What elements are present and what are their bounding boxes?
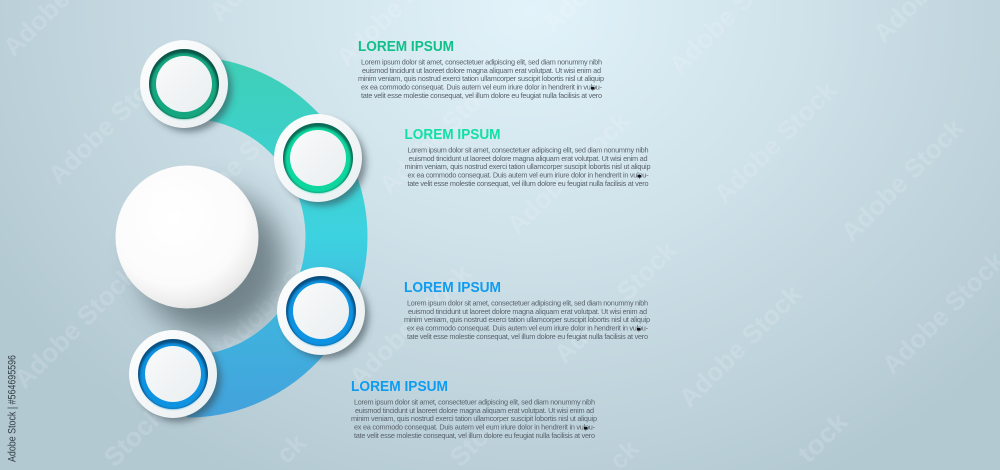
body text 3: tate velit esse molestie consequat, vel illum dolore eu feugiat nulla facilisis at vero	[407, 332, 648, 341]
body text 4: Lorem ipsum dolor sit amet, consectetuer adipiscing elit, sed diam nonummy nibh	[354, 398, 595, 406]
node 2: bright green ring button	[274, 114, 366, 206]
body text 1: tate velit esse molestie consequat, vel illum dolore eu feugiat nulla facilisis at vero	[361, 91, 602, 100]
node 1: green ring button	[140, 40, 232, 132]
text block 2	[404, 127, 650, 188]
watermark pattern: ck	[270, 427, 312, 469]
body text 4: minim veniam, quis nostrud exerci tation ullamcorper suscipit lobortis nisl ut aliquip	[351, 414, 597, 423]
body text 3: minim veniam, quis nostrud exerci tation ullamcorper suscipit lobortis nisl ut aliquip	[404, 315, 650, 324]
watermark pattern: Adobe Stock	[170, 95, 305, 230]
watermark pattern: tock	[791, 406, 854, 469]
watermark pattern: Adobe Stock	[548, 234, 683, 369]
node 3: blue ring button	[277, 267, 369, 359]
body text 2: tate velit esse molestie consequat, vel illum dolore eu feugiat nulla facilisis at vero	[408, 179, 648, 188]
body text 2: Lorem ipsum dolor sit amet, consectetuer adipiscing elit, sed diam nonummy nibh	[408, 146, 648, 154]
heading 2: LOREM IPSUM	[404, 127, 500, 143]
shadow of central sphere	[140, 190, 284, 334]
stock credit: Adobe Stock | #564695596	[6, 355, 18, 462]
body text 4: tate velit esse molestie consequat, vel illum dolore eu feugiat nulla facilisis at vero	[354, 431, 595, 440]
body text 2: minim veniam, quis nostrud exerci tation ullamcorper suscipit lobortis nisl ut aliquip	[404, 162, 650, 171]
watermark pattern: Adobe Stock	[673, 278, 808, 413]
watermark pattern: Adobe Stock	[343, 257, 478, 392]
heading 4: LOREM IPSUM	[351, 379, 448, 395]
body text 4	[351, 398, 597, 440]
body text 3: Lorem ipsum dolor sit amet, consectetuer adipiscing elit, sed diam nonummy nibh	[407, 298, 648, 308]
curved gradient arc band	[187, 88, 336, 386]
node 4: blue ring button	[129, 330, 221, 422]
body text 1: minim veniam, quis nostrud exerci tation ullamcorper suscipit lobortis nisl ut aliquip	[358, 74, 604, 83]
body text 3: ex ea commodo consequat. Duis autem vel eum iriure dolor in hendrerit in vulpu-	[407, 323, 649, 332]
heading 1: LOREM IPSUM	[358, 39, 454, 55]
watermark pattern: Adobe Stock	[835, 112, 970, 247]
watermark pattern: Adobe Stock	[373, 65, 508, 200]
body text 1: euismod tincidunt ut laoreet dolore magna aliquam erat volutpat. Ut wisi enim ad	[362, 66, 601, 75]
central white sphere	[116, 166, 258, 308]
watermark pattern: Adobe Stock	[708, 74, 843, 209]
body text 1: Lorem ipsum dolor sit amet, consectetuer adipiscing elit, sed diam nonummy nibh	[361, 58, 602, 66]
body text 4: euismod tincidunt ut laoreet dolore magna aliquam erat volutpat. Ut wisi enim ad	[355, 406, 594, 415]
text block 4	[351, 379, 597, 440]
text block 3	[404, 280, 650, 341]
body text 2	[404, 146, 650, 188]
watermark pattern: Adobe Stock	[213, 224, 348, 359]
heading 3: LOREM IPSUM	[404, 280, 501, 296]
watermark pattern: Adobe Stock	[501, 105, 636, 240]
body text 4: ex ea commodo consequat. Duis autem vel eum iriure dolor in hendrerit in vulpu-	[354, 422, 596, 431]
text block 1	[358, 39, 604, 100]
body text 1: ex ea commodo consequat. Duis autem vel eum iriure dolor in hendrerit in vulpu-	[361, 82, 603, 91]
watermark pattern: Adobe Stock	[8, 259, 143, 394]
body text 1	[358, 58, 604, 100]
body text 3: euismod tincidunt ut laoreet dolore magna aliquam erat volutpat. Ut wisi enim ad	[408, 307, 647, 316]
body text 2: euismod tincidunt ut laoreet dolore magna aliquam erat volutpat. Ut wisi enim ad	[408, 154, 648, 163]
body text 2: ex ea commodo consequat. Duis autem vel eum iriure dolor in hendrerit in vulpu-	[408, 170, 649, 179]
body text 3	[404, 298, 650, 341]
watermark pattern: Adobe Stock	[42, 55, 177, 190]
